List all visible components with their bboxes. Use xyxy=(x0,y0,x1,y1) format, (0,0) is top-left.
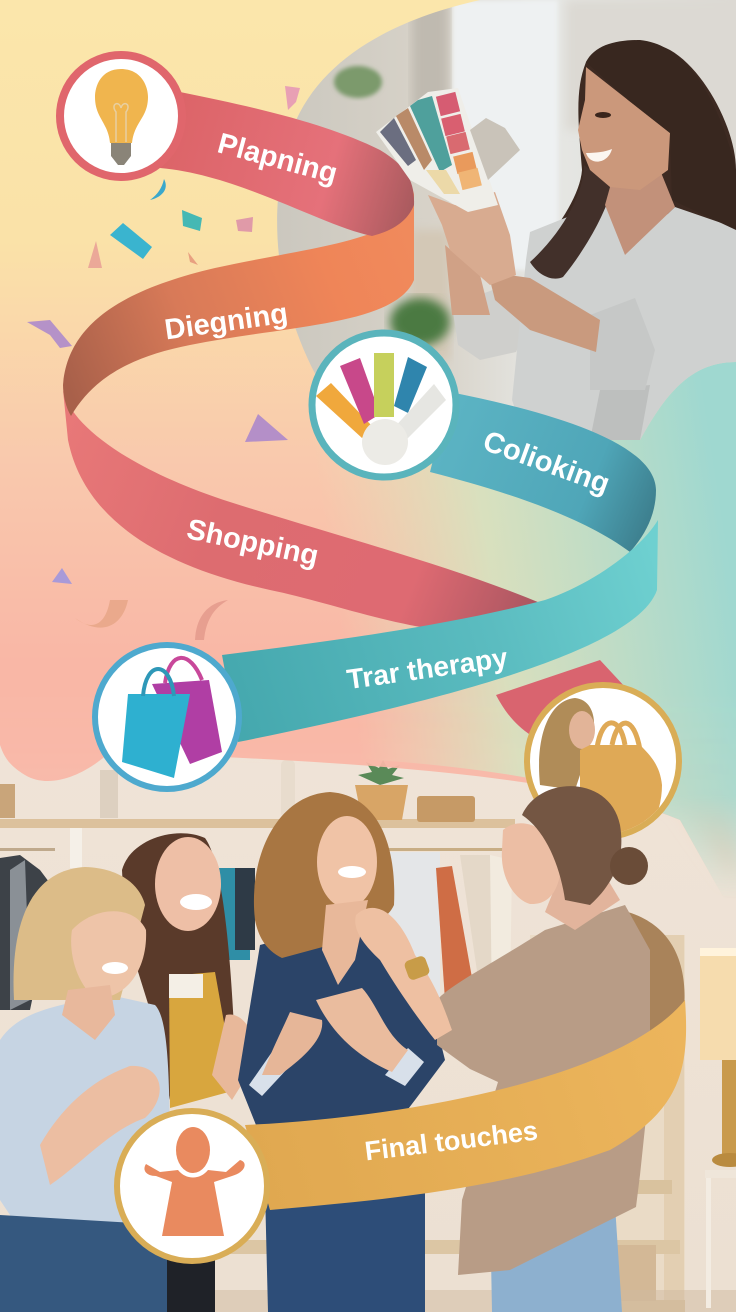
step icon: light bulb xyxy=(60,55,182,177)
top room photo xyxy=(240,0,736,450)
step icon: bag with woman xyxy=(527,685,679,837)
step icon: shopping bags xyxy=(95,645,239,789)
front sleeve xyxy=(590,298,655,390)
face xyxy=(578,67,670,190)
ribbon: colouring xyxy=(430,392,656,552)
hanging plant xyxy=(334,66,382,98)
bulb filament xyxy=(114,104,128,142)
smile xyxy=(586,149,612,162)
small portrait xyxy=(539,698,594,790)
lower shelf unit xyxy=(0,935,736,1312)
bulb base xyxy=(111,143,131,165)
label: Planning: Plapning xyxy=(214,128,341,190)
bulb glass xyxy=(95,69,148,143)
confetti xyxy=(27,86,300,640)
hair back xyxy=(530,42,736,276)
soft glow under backdrop xyxy=(110,700,736,880)
label: Final touches: Final touches xyxy=(363,1115,539,1166)
curtain xyxy=(412,0,448,110)
back forearm xyxy=(445,245,490,315)
shirt shading xyxy=(590,385,650,440)
label: Shopping: Shopping xyxy=(184,513,321,573)
neck xyxy=(605,170,675,255)
figure head xyxy=(176,1127,210,1173)
wall panel xyxy=(566,0,736,130)
label: Retail therapy: Trar therapy xyxy=(345,642,510,695)
hair front xyxy=(586,40,736,230)
hair curtain over shoulder xyxy=(530,165,612,279)
ribbon: final touches fold behind woman xyxy=(600,912,685,1060)
potted plant xyxy=(390,298,450,346)
forearm xyxy=(488,272,600,352)
ribbon: shopping continuation, lower right xyxy=(496,660,626,736)
label: Designing: Diegning xyxy=(163,298,290,346)
friend 4: hair bun and knit cardigan xyxy=(355,786,650,1312)
friend 2: long dark hair xyxy=(122,833,255,1312)
ribbon: shopping xyxy=(63,390,545,630)
tote bag xyxy=(580,745,662,835)
jacket cuffs xyxy=(249,1052,288,1096)
ribbon: designing xyxy=(63,190,414,416)
friend 1: blonde bob xyxy=(0,867,170,1312)
ribbon: retail therapy xyxy=(222,520,658,742)
floor lamp xyxy=(700,948,736,1308)
ribbon: final touches xyxy=(245,1000,686,1210)
back sleeve xyxy=(452,280,540,360)
friend 3: curly hair and denim jacket xyxy=(238,792,445,1312)
shelf behind xyxy=(410,230,450,360)
step icon: paint swatches xyxy=(312,333,456,477)
window xyxy=(452,0,558,270)
wall shelf with decor xyxy=(0,760,515,828)
figure body xyxy=(144,1160,245,1236)
bottom room photo xyxy=(0,640,736,1312)
hand xyxy=(428,192,516,285)
gradient backdrop blob xyxy=(0,0,736,920)
label: Coloring: Colioking xyxy=(479,425,614,501)
ribbon: planning xyxy=(160,92,414,236)
clothing rack xyxy=(0,828,512,1010)
group of friends xyxy=(0,786,650,1312)
step icon: final touches figure xyxy=(117,1111,267,1261)
shirt xyxy=(512,200,736,440)
eye xyxy=(595,112,611,118)
swatch fan xyxy=(376,88,520,212)
small portrait face xyxy=(569,711,595,749)
teal wash xyxy=(367,362,736,887)
top woman with paint swatches xyxy=(376,40,736,440)
